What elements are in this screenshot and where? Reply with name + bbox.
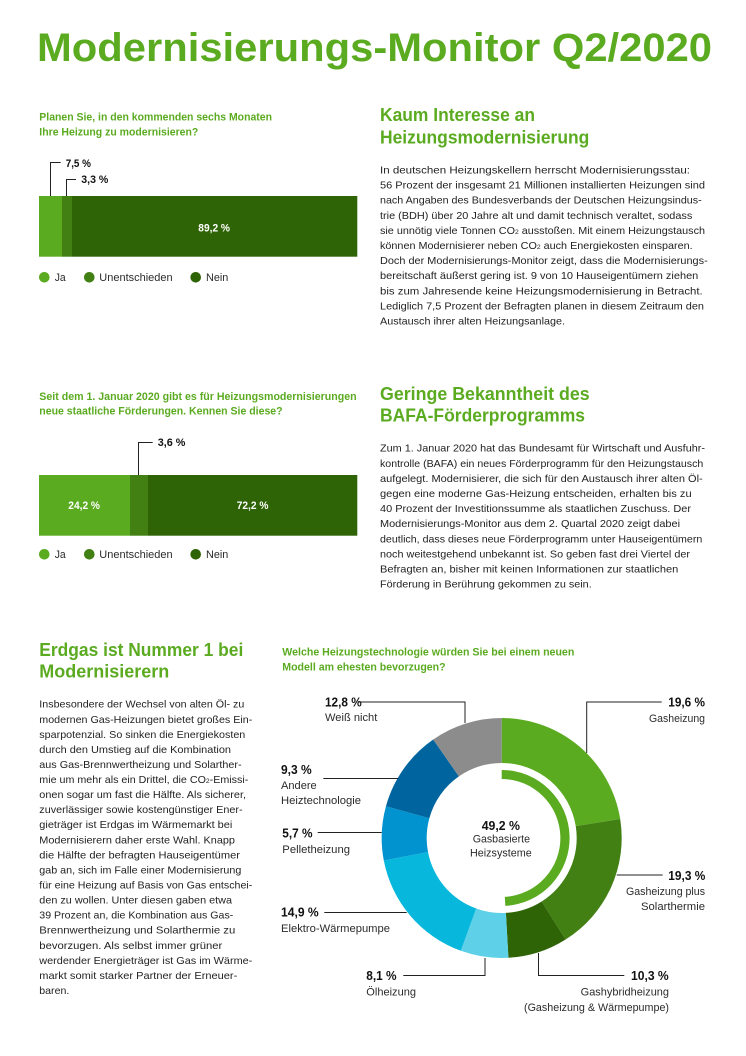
label: Gasheizung plus Solarthermie: 19,3 % xyxy=(668,869,705,883)
body text: bevorzugen. Als selbst immer grüner xyxy=(39,940,223,952)
panel: modernisation intent chart xyxy=(39,112,357,284)
label: Ölheizung: Ölheizung xyxy=(366,987,416,999)
legend: Nein xyxy=(206,272,228,284)
body text: sparpotenzial. So sinken die Energiekosten xyxy=(39,729,245,741)
body text: aufgelegt. Modernisierer, die sich für den Austausch ihrer alten Öl- xyxy=(380,473,703,485)
heading: Erdgas ist Nummer 1 bei xyxy=(39,639,243,660)
body text: baren. xyxy=(39,985,69,997)
body text: In deutschen Heizungskellern herrscht Modernisierungsstau: xyxy=(380,164,690,176)
chart question xyxy=(39,112,272,139)
label: Gashybridheizung: Gashybridheizung xyxy=(581,987,669,999)
label: Gasheizung plus Solarthermie: Solarthermie xyxy=(641,901,705,913)
centre label xyxy=(470,819,532,860)
body text: gegen eine moderne Gas-Heizung entscheiden, erhalten bis zu xyxy=(380,488,692,500)
body text: aus Gas-Brennwertheizung und Solarther- xyxy=(39,759,242,771)
panel: heating technology chart xyxy=(281,647,706,1014)
chart question: Seit dem 1. Januar 2020 gibt es für Heizungsmodernisierungen xyxy=(39,391,357,403)
legend: Unentschieden xyxy=(99,549,173,561)
label: Andere Heiztechnologie: Heiztechnologie xyxy=(281,795,361,807)
heading: Modernisierern xyxy=(39,661,169,682)
label: Weiß nicht: Weiß nicht xyxy=(325,712,377,724)
label: Ölheizung xyxy=(366,958,485,999)
chart question: neue staatliche Förderungen. Kennen Sie diese? xyxy=(39,406,283,418)
stacked bar chart xyxy=(39,196,357,257)
label: Elektro-Wärmepumpe: 14,9 % xyxy=(281,906,319,920)
body text: werdender Energieträger ist Gas im Wärme- xyxy=(38,955,253,967)
body text: trie (BDH) über 20 Jahre alt und damit technisch veraltet, sodass xyxy=(380,210,692,222)
chart question: Modell am ehesten bevorzugen? xyxy=(282,662,446,674)
legend: Nein xyxy=(206,549,228,561)
body text: noch weitestgehend unbekannt ist. So geben fast drei Viertel der xyxy=(380,548,691,560)
centre label: 49,2 % xyxy=(482,819,520,833)
label: Pelletheizung xyxy=(282,827,382,856)
label: Elektro-Wärmepumpe: Elektro-Wärmepumpe xyxy=(281,923,390,935)
label: Gashybridheizung: 10,3 % xyxy=(631,969,669,983)
body text: bis zum Jahresende keine Heizungsmodernisierung in Betracht. xyxy=(380,285,703,297)
body text: gab an, sich im Falle einer Modernisierung xyxy=(39,864,241,876)
stacked bar chart: 72,2 % xyxy=(237,500,269,512)
chart question: Ihre Heizung zu modernisieren? xyxy=(39,127,198,139)
chart question: Planen Sie, in den kommenden sechs Monaten xyxy=(39,112,272,124)
body text: nach Angaben des Bundesverbands der Deutschen Heizungsindus- xyxy=(380,195,702,207)
callout: 7,5 % xyxy=(50,158,91,196)
panel: natural gas article xyxy=(38,639,253,997)
heading: Geringe Bekanntheit des xyxy=(380,383,590,404)
body text: bereitschaft äußerst gering ist. 9 von 10 Hauseigentümern ziehen xyxy=(380,270,698,282)
legend: Ja xyxy=(55,272,66,284)
body text: Doch der Modernisierungs-Monitor zeigt, dass die Modernisierungs- xyxy=(380,255,708,267)
stacked bar chart xyxy=(39,475,357,536)
body text: sie unnötig viele Tonnen CO 2 ausstoßen. Mit einem Heizungstausch xyxy=(380,225,705,237)
centre label: Gasbasierte xyxy=(473,834,530,846)
stacked bar chart: 24,2 % xyxy=(68,500,100,512)
body text: modernen Gas-Heizungen bietet großes Ein- xyxy=(39,714,253,726)
heading: Heizungsmodernisierung xyxy=(380,126,589,147)
label: Andere Heiztechnologie: 9,3 % xyxy=(281,763,312,777)
chart question xyxy=(282,647,574,674)
body text: gieträger ist Erdgas im Wärmemarkt bei xyxy=(39,819,232,831)
body text: Modernisierern daher erste Wahl. Knapp xyxy=(39,834,235,846)
chart question xyxy=(39,391,357,418)
body text: Brennwertheizung und Solarthermie zu xyxy=(39,925,235,937)
body text: markt somit starker Partner der Erneuer- xyxy=(39,970,238,982)
body text: Zum 1. Januar 2020 hat das Bundesamt für Wirtschaft und Ausfuhr- xyxy=(380,443,706,455)
callout: 3,6 % xyxy=(138,437,186,475)
stacked bar chart: 89,2 % xyxy=(198,222,230,234)
heading: Kaum Interesse an xyxy=(380,104,535,125)
body text: Förderung in Berührung gekommen zu sein. xyxy=(380,579,592,591)
body text: mie um mehr als ein Drittel, die CO 2-Emissi- xyxy=(39,774,249,786)
body text: den zu wollen. Unter diesen gaben etwa xyxy=(39,895,232,907)
label: Andere Heiztechnologie: Andere xyxy=(281,780,317,792)
body text: Insbesondere der Wechsel von alten Öl- zu xyxy=(39,699,244,711)
body text: durch den Umstieg auf die Kombination xyxy=(39,744,231,756)
label: Pelletheizung: Pelletheizung xyxy=(282,844,350,856)
centre label: Heizsysteme xyxy=(470,848,532,860)
body text: Lediglich 7,5 Prozent der Befragten planen in diesem Zeitraum den xyxy=(380,300,704,312)
label: Ölheizung: 8,1 % xyxy=(366,969,397,983)
body text: onen sogar um fast die Hälfte. Als sicherer, xyxy=(39,789,246,801)
body text: 56 Prozent der insgesamt 21 Millionen installierten Heizungen sind xyxy=(380,180,705,192)
label: Andere Heiztechnologie xyxy=(281,763,398,807)
callout: 7,5 %: 7,5 % xyxy=(66,158,91,170)
body text: 40 Prozent der Investitionssumme als staatlichen Zuschuss. Der xyxy=(380,503,692,515)
body text: deutlich, dass dieses neue Förderprogramm unter Hauseigentümern xyxy=(380,533,702,545)
label: Elektro-Wärmepumpe xyxy=(281,906,407,935)
label: Gasheizung: Gasheizung xyxy=(649,713,705,725)
chart question: Welche Heizungstechnologie würden Sie bei einem neuen xyxy=(282,647,574,659)
body text: für eine Heizung auf Basis von Gas entschei- xyxy=(39,880,253,892)
label: Weiß nicht xyxy=(325,696,465,724)
title: Modernisierungs-Monitor Q2/2020 xyxy=(37,26,712,70)
callout: 3,6 %: 3,6 % xyxy=(158,437,186,449)
body text: kontrolle (BAFA) ein neues Förderprogramm für den Heizungstausch xyxy=(380,458,703,470)
legend: Unentschieden xyxy=(99,272,173,284)
label: Weiß nicht: 12,8 % xyxy=(325,696,362,710)
body text: können Modernisierer neben CO 2 auch Energiekosten einsparen. xyxy=(380,240,693,252)
body text: Befragten an, bisher mit keinen Informationen zur staatlichen xyxy=(380,564,678,576)
body text: Austausch ihrer alten Heizungsanlage. xyxy=(380,316,565,328)
donut chart xyxy=(382,718,622,958)
callout: 3,3 % xyxy=(66,174,108,196)
label: Gashybridheizung xyxy=(524,953,669,1014)
label: Gashybridheizung: (Gasheizung & Wärmepumpe) xyxy=(524,1002,669,1014)
heading xyxy=(380,383,590,426)
label: Gasheizung plus Solarthermie xyxy=(617,869,706,913)
heading xyxy=(380,104,589,147)
panel: BAFA article xyxy=(380,383,706,591)
label: Gasheizung xyxy=(587,696,705,753)
legend xyxy=(39,549,228,561)
legend: Ja xyxy=(55,549,66,561)
inner arc: gas-based share xyxy=(502,770,570,906)
body text: die Hälfte der befragten Hauseigentümer xyxy=(39,849,241,861)
body text: zuverlässiger sowie kostengünstiger Ener- xyxy=(39,804,243,816)
callout: 3,3 %: 3,3 % xyxy=(81,174,108,186)
label: Gasheizung plus Solarthermie: Gasheizung plus xyxy=(626,886,706,898)
body text xyxy=(380,443,706,591)
body text xyxy=(38,699,253,997)
panel: funding awareness chart xyxy=(39,391,357,561)
heading xyxy=(39,639,243,682)
panel: low interest article xyxy=(380,104,708,328)
body text: Modernisierungs-Monitor aus dem 2. Quartal 2020 zeigt dabei xyxy=(380,518,680,530)
body text: 39 Prozent an, die Kombination aus Gas- xyxy=(39,910,234,922)
body text xyxy=(380,164,708,328)
heading: BAFA-Förderprogramms xyxy=(380,405,585,426)
legend xyxy=(39,272,228,284)
label: Gasheizung: 19,6 % xyxy=(668,696,705,710)
label: Pelletheizung: 5,7 % xyxy=(282,827,313,841)
